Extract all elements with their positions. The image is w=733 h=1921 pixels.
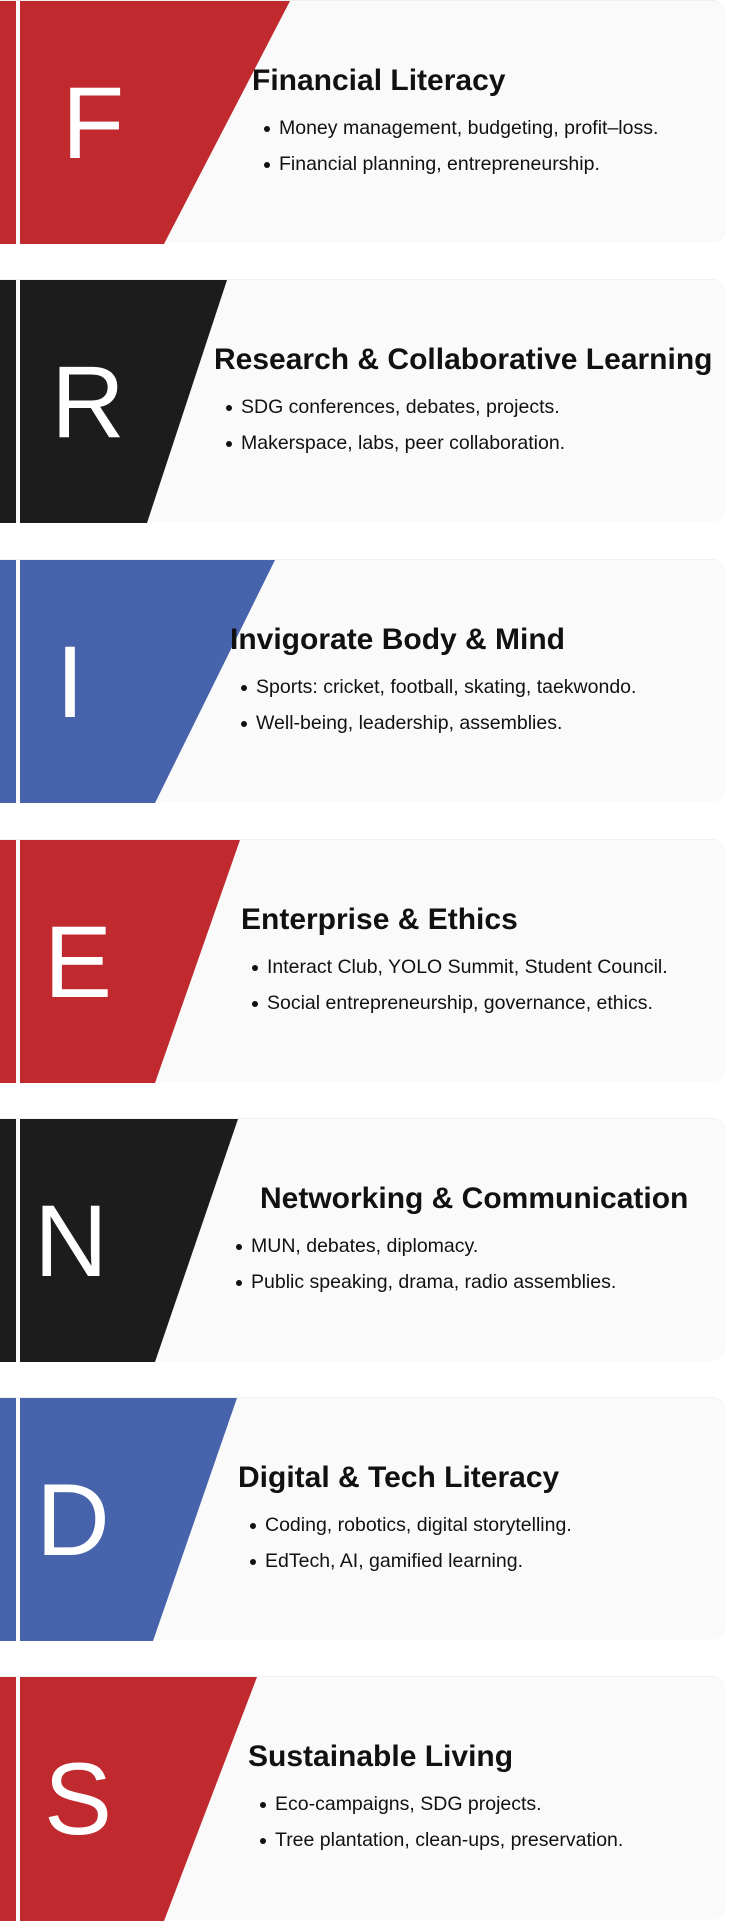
panel: S Sustainable (0, 1676, 726, 1920)
shape: red S banner (0, 1677, 257, 1921)
panel: N Networking (0, 1118, 726, 1361)
bullets: Financial planning, entrepreneurship. (279, 153, 600, 175)
bullets (236, 1235, 616, 1293)
bullets (250, 1514, 572, 1572)
bullets (260, 1793, 623, 1851)
shape: blue I banner (0, 560, 275, 803)
letter F: F (62, 66, 124, 180)
bullets (241, 676, 636, 734)
title: Financial Literacy (252, 64, 505, 97)
bullets: SDG conferences, debates, projects. (241, 396, 560, 418)
letter D: D (36, 1463, 110, 1577)
bullets: Social entrepreneurship, governance, ethics. (267, 992, 653, 1014)
panel: E Enterprise (0, 839, 726, 1082)
bullets: Sports: cricket, football, skating, taekwondo. (256, 676, 636, 698)
bullets: Public speaking, drama, radio assemblies. (251, 1271, 616, 1293)
letter I: I (56, 625, 84, 739)
panel: D Digital (0, 1397, 726, 1640)
bullets: MUN, debates, diplomacy. (251, 1235, 478, 1257)
title: Enterprise & Ethics (241, 903, 518, 936)
bullets: Money management, budgeting, profit–loss. (279, 117, 658, 139)
bullets (252, 956, 668, 1014)
bullets (264, 117, 658, 175)
bullets: Tree plantation, clean-ups, preservation. (275, 1829, 623, 1851)
bullets: Interact Club, YOLO Summit, Student Council. (267, 956, 668, 978)
shape: red F banner (0, 1, 290, 244)
letter E: E (44, 905, 112, 1019)
shape: black N banner (0, 1119, 238, 1362)
bullets: Eco-campaigns, SDG projects. (275, 1793, 542, 1815)
bullets: Well-being, leadership, assemblies. (256, 712, 562, 734)
bullets: EdTech, AI, gamified learning. (265, 1550, 523, 1572)
bullets: Makerspace, labs, peer collaboration. (241, 432, 565, 454)
shape: red E banner (0, 840, 240, 1083)
letter R: R (51, 345, 125, 459)
panel: F Financial Literacy (0, 0, 726, 243)
shape: blue D banner (0, 1398, 237, 1641)
title: Research & Collaborative Learning (214, 343, 712, 376)
letter N: N (34, 1184, 108, 1298)
title: Invigorate Body & Mind (230, 623, 565, 656)
panel: R Research (0, 279, 726, 522)
shape: black R banner (0, 280, 227, 523)
panel: I Invigorate (0, 559, 726, 802)
title: Sustainable Living (248, 1740, 513, 1773)
bullets (226, 396, 565, 454)
letter S: S (44, 1742, 112, 1856)
title: Networking & Communication (260, 1182, 688, 1215)
bullets: Coding, robotics, digital storytelling. (265, 1514, 572, 1536)
title: Digital & Tech Literacy (238, 1461, 559, 1494)
